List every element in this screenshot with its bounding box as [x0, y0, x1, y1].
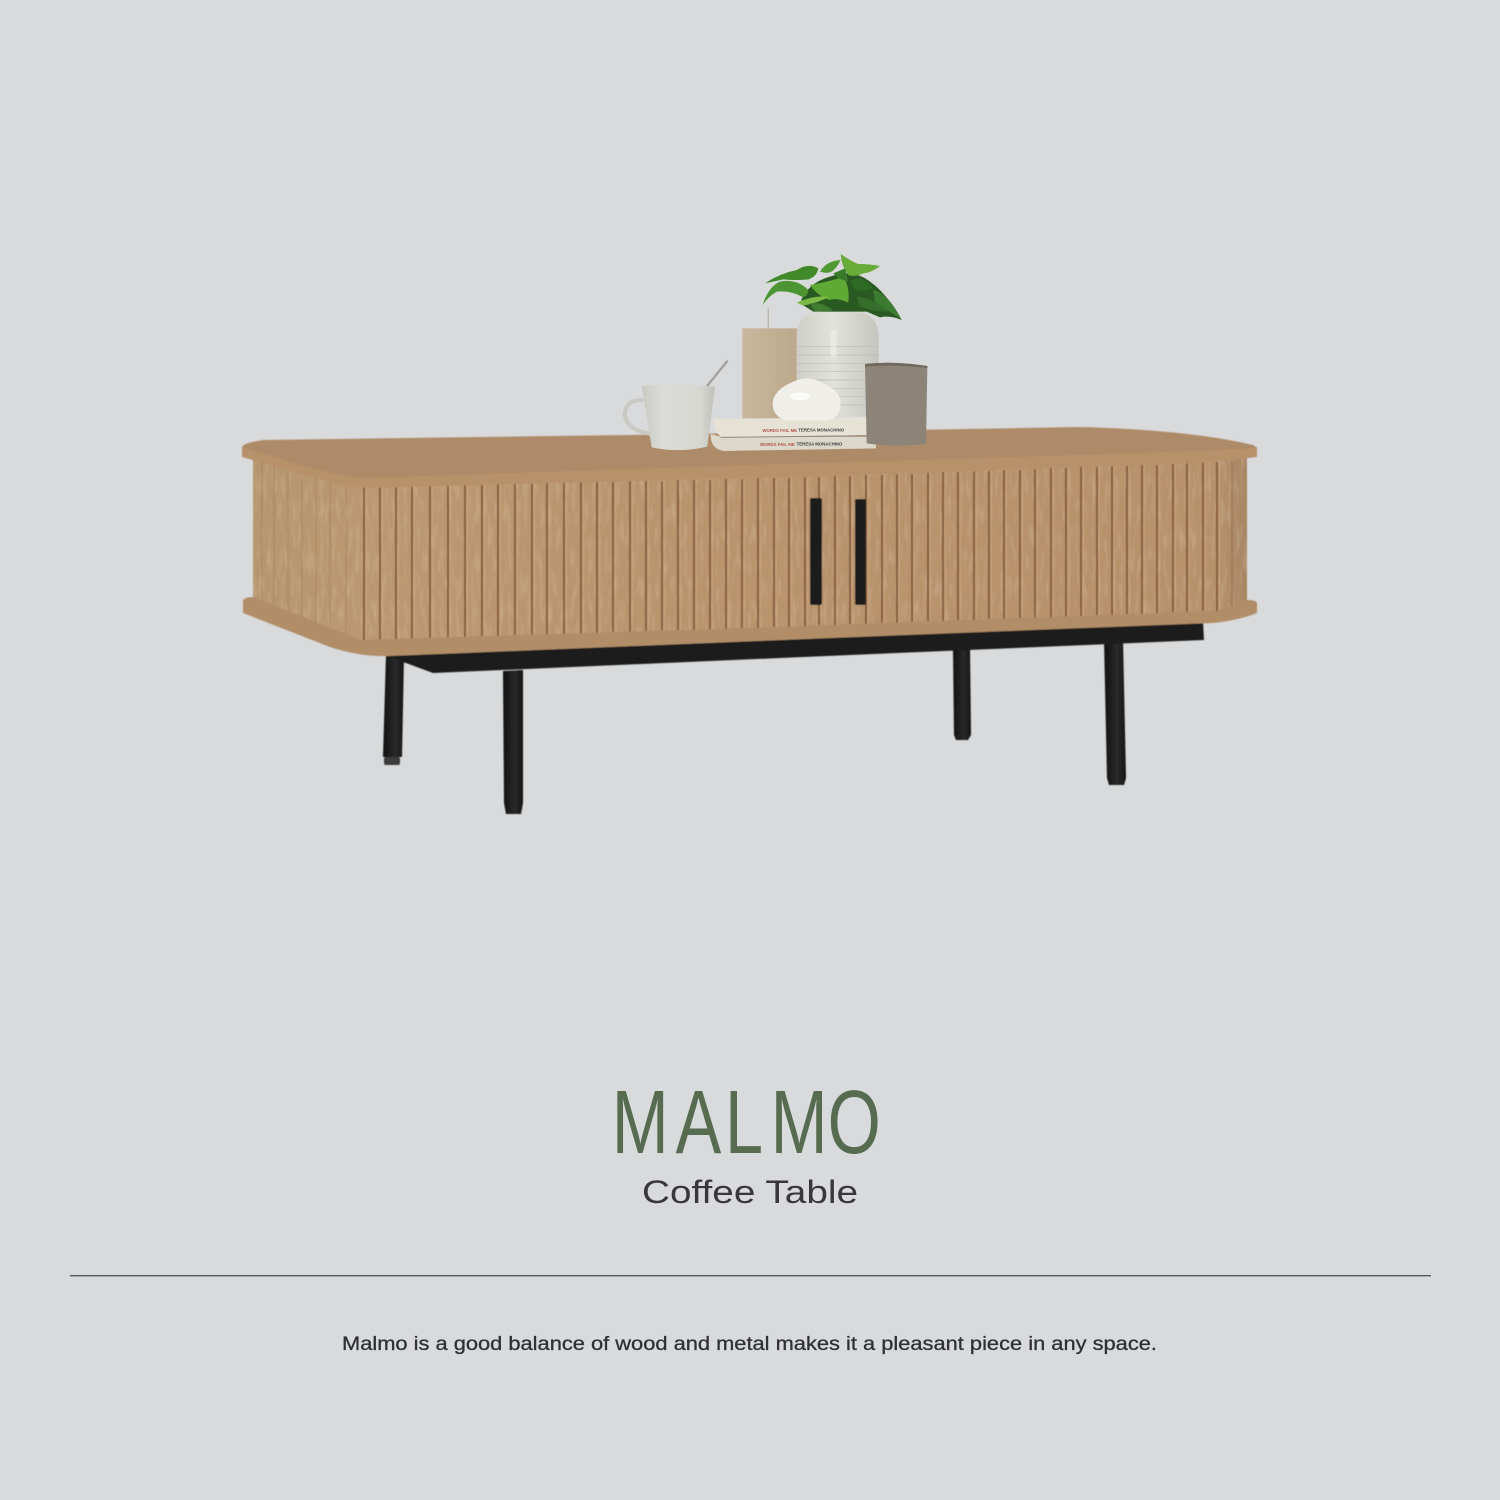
description: Malmo is a good balance of wood and metal makes it a pleasant piece in any space.	[342, 1333, 1157, 1355]
icon: small round vase	[773, 378, 841, 421]
cabinet body with tambour slats	[250, 450, 1250, 650]
icon: books: TERESA MONACHINO	[797, 441, 843, 446]
slat grooves	[364, 462, 1217, 640]
table leg: front left	[503, 670, 523, 814]
icon: books: WORDS FAIL ME	[760, 442, 795, 447]
table top surface	[240, 425, 1260, 480]
book spine text: WORDS FAIL ME	[762, 428, 797, 433]
icon: plant	[763, 254, 902, 320]
icon: books: TERESA MONACHINO	[798, 428, 845, 433]
table leg: back left	[383, 655, 404, 765]
title: MALMO: MALMO	[612, 1072, 881, 1172]
base plinth	[243, 597, 1257, 656]
decor objects on the table	[625, 254, 927, 451]
icon: candle	[742, 308, 797, 418]
icon: stone pot	[865, 363, 927, 446]
icon: mug	[625, 385, 715, 450]
divider	[70, 1275, 1431, 1276]
icon: books	[711, 417, 877, 451]
slat highlights	[366, 462, 1219, 640]
black metal rail	[387, 622, 1204, 673]
product illustration: coffee table	[240, 425, 1260, 814]
table top edge band	[242, 447, 1257, 488]
infographic canvas	[70, 254, 1431, 1354]
table leg: inner right	[953, 648, 971, 740]
subtitle: Coffee Table: Coffee Table	[642, 1174, 858, 1210]
table leg: far right	[1104, 640, 1126, 785]
icon: spoon	[706, 361, 728, 387]
door handles	[810, 498, 866, 605]
icon: ribbed vase	[797, 313, 879, 417]
